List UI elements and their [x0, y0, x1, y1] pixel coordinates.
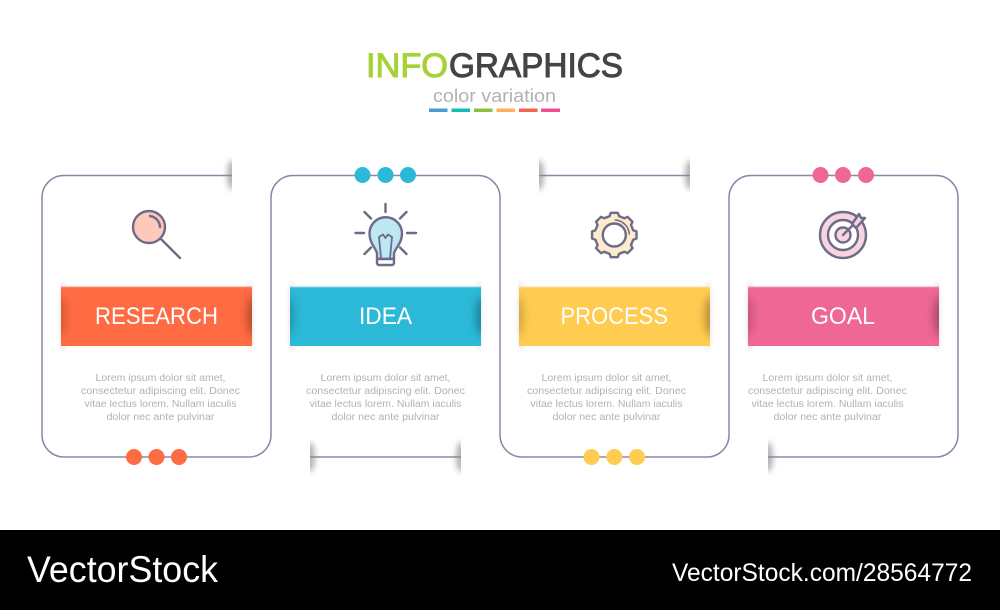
description text: vitae lectus lorem. Nullam iaculis — [530, 398, 682, 410]
description text — [306, 372, 465, 423]
line end shadow — [763, 442, 773, 472]
panel outline — [729, 176, 958, 457]
description text: vitae lectus lorem. Nullam iaculis — [84, 398, 236, 410]
banner: research: RESEARCH — [95, 303, 218, 330]
description text: consectetur adipiscing elit. Donec — [527, 385, 686, 397]
panel: process — [500, 160, 729, 465]
dots — [354, 167, 416, 183]
subtitle: color variation — [433, 86, 556, 106]
line end shadows — [534, 160, 695, 190]
banner: goal: GOAL — [811, 303, 875, 330]
footer logo: VectorStock — [27, 549, 218, 590]
banner: goal — [746, 282, 941, 349]
title — [366, 47, 623, 85]
line end shadows — [305, 442, 466, 472]
description text: dolor nec ante pulvinar — [552, 411, 661, 423]
description text: consectetur adipiscing elit. Donec — [306, 385, 465, 397]
description text — [748, 372, 907, 423]
description text: Lorem ipsum dolor sit amet, — [320, 372, 450, 384]
title: INFO — [366, 47, 448, 85]
panel outline — [500, 176, 729, 457]
dots — [812, 167, 874, 183]
banner: process — [517, 282, 712, 349]
banner: process: PROCESS — [560, 303, 668, 330]
line end shadow — [227, 160, 237, 190]
icon: light bulb — [356, 204, 416, 265]
description text: dolor nec ante pulvinar — [774, 411, 882, 423]
footer url: VectorStock.com/28564772 — [672, 559, 972, 587]
title: GRAPHICS — [449, 47, 623, 85]
description text — [81, 372, 240, 423]
description text: dolor nec ante pulvinar — [106, 411, 215, 423]
panel outline — [271, 176, 500, 457]
description text: Lorem ipsum dolor sit amet, — [542, 372, 672, 384]
panel outline — [42, 176, 271, 457]
description text: consectetur adipiscing elit. Donec — [748, 385, 907, 397]
description text: consectetur adipiscing elit. Donec — [81, 385, 240, 397]
description text — [527, 372, 686, 423]
icon: gear — [592, 213, 637, 257]
description text: dolor nec ante pulvinar — [332, 411, 440, 423]
panel: goal — [729, 167, 958, 472]
footer bar — [0, 530, 1000, 610]
panel: research — [42, 160, 271, 465]
description text: vitae lectus lorem. Nullam iaculis — [752, 398, 904, 410]
description text: vitae lectus lorem. Nullam iaculis — [310, 398, 462, 410]
banner: research — [59, 282, 254, 349]
description text: Lorem ipsum dolor sit amet, — [762, 372, 892, 384]
dots — [584, 449, 645, 465]
colour swatches — [429, 108, 560, 112]
icon: magnifier — [133, 211, 180, 258]
banner: idea — [288, 282, 483, 349]
banner: idea: IDEA — [359, 303, 412, 330]
description text: Lorem ipsum dolor sit amet, — [96, 372, 226, 384]
panel: idea — [271, 167, 500, 472]
icon: target — [820, 212, 866, 258]
dots — [126, 449, 187, 465]
